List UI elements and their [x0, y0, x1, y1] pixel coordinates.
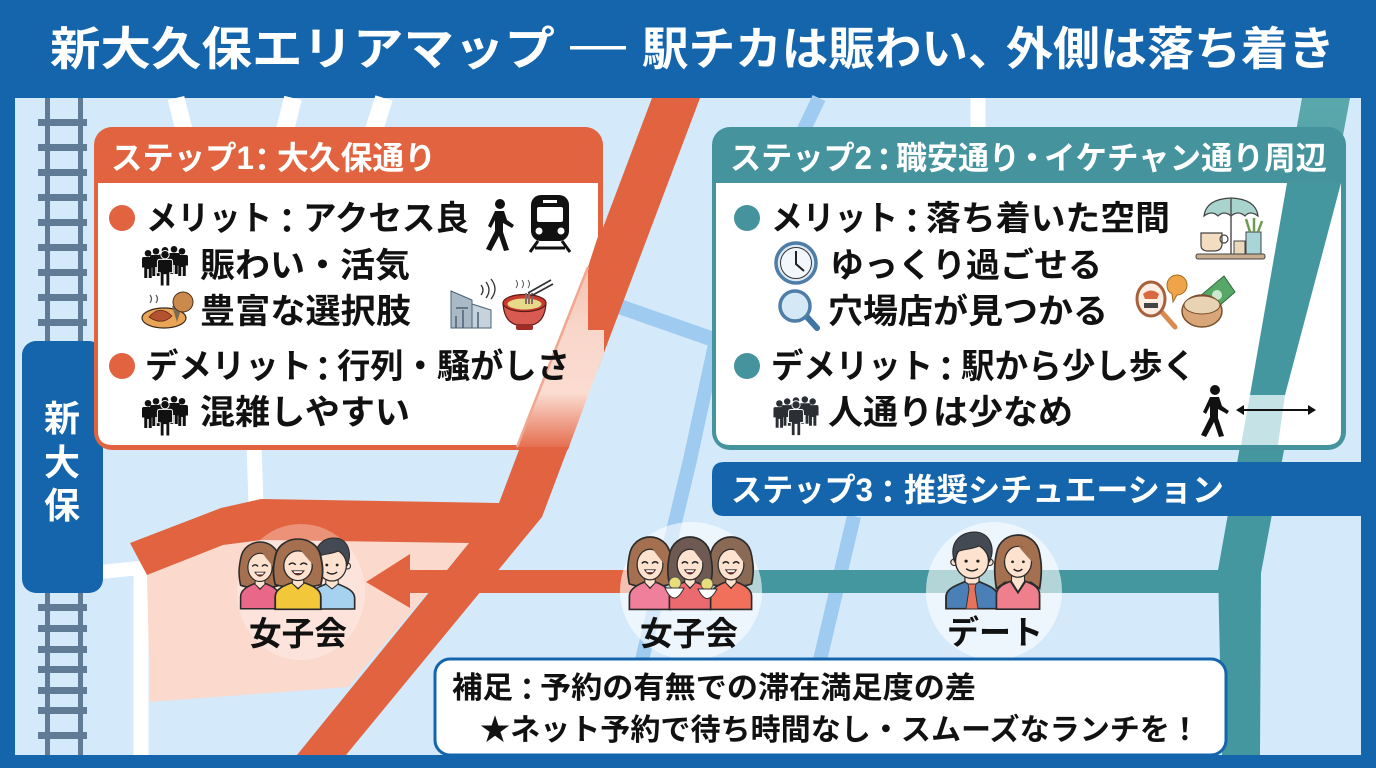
arrow: [366, 554, 450, 608]
demerit line: [109, 347, 570, 389]
hidden gems text: 穴場店が見つかる: [828, 292, 1108, 331]
icon: noisy street: [451, 279, 495, 328]
callout: note: ★ネット予約で待ち時間なし・スムーズなランチを！: [480, 713, 1200, 747]
title: 新大久保エリアマップ: [50, 23, 555, 75]
people illustration: [239, 538, 355, 609]
scene: girls' party left: [237, 524, 365, 660]
icon: cafe table: [1196, 198, 1265, 259]
merit line: メリット: [771, 200, 898, 238]
scene: girls' party middle: [620, 522, 762, 660]
icon: walker: [486, 199, 514, 251]
step 1 heading: ステップ1: [111, 140, 254, 176]
label: 女子会: [640, 615, 738, 652]
icon: ramen: [503, 280, 553, 330]
demerit line: [734, 347, 1196, 389]
heading: step 3: ステップ3: [731, 472, 873, 508]
people illustration: [946, 532, 1041, 609]
demerit line: ：: [306, 351, 340, 389]
station sign: 新: [44, 398, 80, 439]
step 1 heading: 大久保通り: [277, 140, 436, 176]
step 2 heading: [730, 140, 1327, 178]
station sign: 保: [44, 485, 80, 526]
merit line: アクセス良: [303, 200, 469, 238]
title: 駅チカは賑わい: [642, 23, 968, 75]
choices text: 豊富な選択肢: [200, 293, 411, 331]
merit line: [734, 200, 1170, 241]
demerit line: ：: [929, 351, 963, 389]
title: 、: [968, 23, 1014, 75]
teal road: [1218, 98, 1350, 755]
congestion text: 混雑しやすい: [200, 394, 410, 432]
panel: step 2: [712, 127, 1346, 450]
demerit line: デメリット: [145, 347, 312, 386]
pink area: [147, 540, 469, 702]
merit line: [109, 200, 469, 241]
step 1 heading: [111, 140, 436, 178]
merit line: ：: [895, 203, 929, 241]
heading: step 3: [712, 462, 1361, 516]
heading: step 3: 推奨シチュエーション: [904, 472, 1224, 508]
step 2 heading: ：: [868, 142, 900, 178]
scene: date: [926, 522, 1062, 660]
icon: food search: [1137, 275, 1235, 327]
panel: step 1: [94, 127, 606, 452]
heading: step 3: ：: [872, 474, 904, 510]
merit line: 落ち着いた空間: [926, 200, 1170, 238]
icon: small crowd: [773, 396, 819, 436]
step 2 heading: ・: [1016, 140, 1048, 176]
title: 外側は落ち着き: [1006, 23, 1335, 75]
demerit line: デメリット: [771, 347, 933, 386]
icon: crowd: [142, 246, 188, 286]
demerit line: 駅から少し歩く: [961, 348, 1196, 386]
people illustration: [628, 537, 753, 609]
step 2 heading: イケチャン通り周辺: [1044, 140, 1327, 176]
station sign: [22, 341, 103, 593]
icon: magnifier: [780, 291, 817, 328]
icon: walker: [1201, 385, 1229, 437]
orange roads: [130, 98, 700, 755]
icon: crowd: [142, 396, 188, 436]
label: デート: [947, 614, 1043, 651]
callout: note: 予約の有無での滞在満足度の差: [540, 672, 976, 705]
map roads: [100, 98, 1350, 755]
step 2 heading: ステップ2: [730, 140, 872, 176]
slow time text: ゆっくり過ごせる: [830, 247, 1102, 285]
demerit line: 行列・騒がしさ: [337, 347, 570, 386]
few people text: 人通りは少なめ: [828, 394, 1073, 432]
title: [50, 23, 1335, 75]
icon: food plate: [142, 292, 193, 328]
callout: note: ：: [512, 674, 542, 707]
merit line: ：: [270, 203, 304, 241]
icon: train: [530, 195, 570, 252]
rail track: [38, 98, 87, 755]
callout: note: [435, 659, 1226, 755]
label: 女子会: [249, 615, 347, 652]
step 2 heading: 職安通り: [896, 140, 1020, 176]
station sign: 大: [44, 442, 80, 483]
icon: clock: [776, 243, 816, 283]
lively text: 賑わい・活気: [200, 247, 410, 285]
merit line: メリット: [146, 200, 272, 238]
callout: note: 補足: [452, 672, 513, 705]
step 1 heading: ：: [246, 142, 278, 178]
icon: distance arrow: [1236, 405, 1316, 415]
